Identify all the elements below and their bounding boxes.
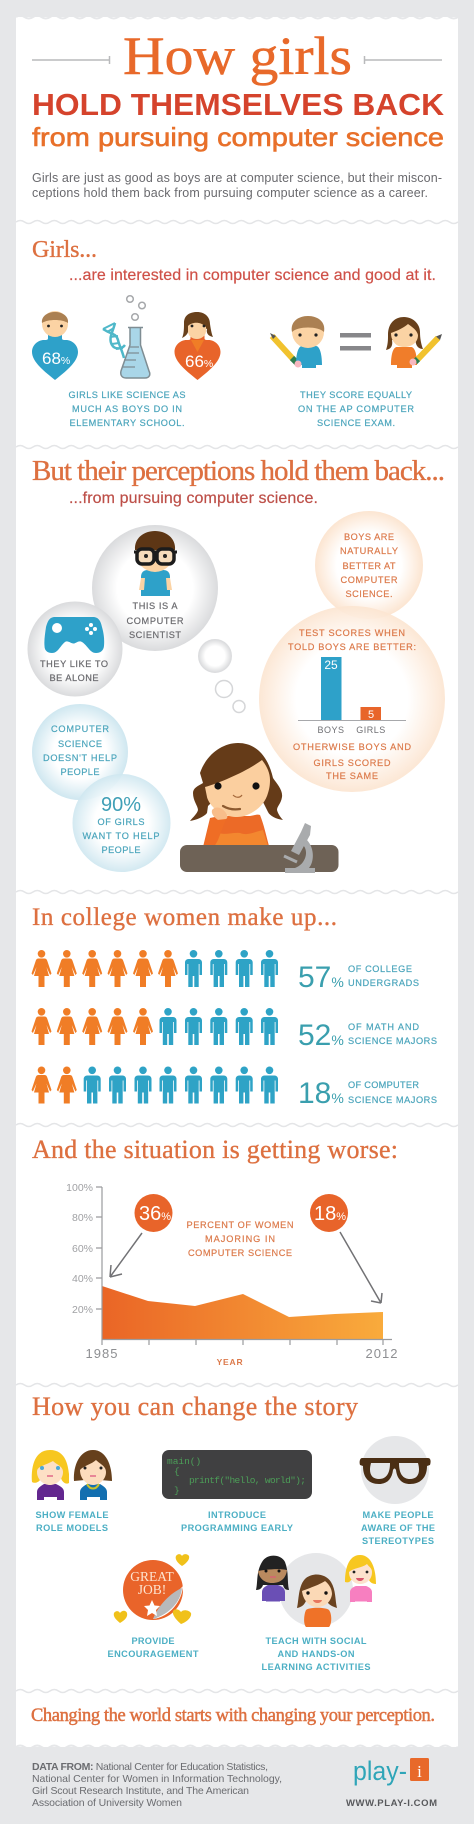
intro text — [32, 171, 442, 200]
area chart: 100% — [66, 1182, 93, 1194]
callout: 36% — [110, 1194, 172, 1277]
icon: great job sticker: GREAT — [130, 1569, 175, 1584]
stat: 18%: SCIENCE MAJORS — [348, 1095, 437, 1105]
bubble: computer scientist: THIS IS A — [132, 601, 178, 611]
section heading: change the story: How you can change the story — [32, 1392, 358, 1421]
bubble: test scores chart: TEST SCORES WHEN — [299, 628, 405, 638]
bubble: boys are naturally better: SCIENCE. — [346, 589, 392, 599]
bubble: test scores chart: GIRLS SCORED — [314, 758, 391, 768]
bubble: boys are naturally better — [315, 511, 423, 619]
caption: stereotypes: MAKE PEOPLE — [362, 1510, 434, 1520]
bubble: computer scientist: SCIENTIST — [129, 630, 181, 640]
bubble: boys are naturally better: NATURALLY — [340, 546, 398, 556]
logo: play-i: i — [417, 1762, 422, 1781]
caption: encouragement: PROVIDE — [132, 1636, 174, 1646]
section heading: perceptions: But their perceptions hold them back... — [32, 455, 445, 487]
caption: stereotypes: STEREOTYPES — [362, 1536, 434, 1546]
stat: 18% — [298, 1077, 437, 1110]
icon: great job sticker — [114, 1554, 191, 1624]
area chart: 2012 — [366, 1346, 398, 1361]
hair — [190, 743, 283, 821]
icon: boy with pencil — [270, 316, 324, 368]
stat: 57%: 57% — [298, 961, 344, 994]
girl: brown hair center — [297, 1575, 337, 1627]
section heading: perceptions: ...from pursuing computer science. — [69, 490, 318, 507]
caption: score equally — [298, 390, 414, 428]
bubble: doesn't help people: COMPUTER — [51, 724, 109, 734]
footer: data sources: Girl Scout Research Institute, and The American — [32, 1785, 249, 1797]
caption: score equally: ON THE AP COMPUTER — [298, 404, 414, 414]
icon: social group of girls — [256, 1553, 376, 1627]
chart caption: PERCENT OF WOMEN — [186, 1220, 294, 1230]
section heading: Girls — [32, 237, 436, 284]
caption: female role models: ROLE MODELS — [36, 1523, 108, 1533]
section heading: perceptions — [32, 455, 445, 507]
code block — [162, 1450, 312, 1499]
pictogram row: 57% — [32, 950, 278, 987]
bubble: 90% want to help: OF GIRLS — [98, 817, 144, 827]
thought bubbles — [198, 640, 245, 712]
callout: 18%: 18% — [314, 1203, 346, 1225]
bubble: like to be alone: THEY LIKE TO — [40, 659, 108, 669]
bubble: doesn't help people: PEOPLE — [60, 767, 100, 777]
stat: 52%: 52% — [298, 1019, 344, 1052]
caption: stereotypes: AWARE OF THE — [361, 1523, 435, 1533]
caption: social and hands-on: AND HANDS-ON — [278, 1649, 355, 1659]
caption: girls like science: ELEMENTARY SCHOOL. — [70, 418, 184, 428]
stat: 57% — [298, 961, 419, 994]
icon: girl with pencil — [386, 317, 442, 368]
caption: introduce programming: PROGRAMMING EARLY — [181, 1523, 293, 1533]
caption: encouragement: ENCOURAGEMENT — [108, 1649, 199, 1659]
section heading: Girls: Girls... — [32, 237, 97, 263]
bubble: like to be alone: BE ALONE — [50, 673, 98, 683]
icon: girl heart 66%: 66% — [185, 352, 213, 371]
logo: play-i — [346, 1756, 437, 1809]
callout: 36%: 36% — [139, 1203, 171, 1225]
illustration: girl at desk with microscope — [180, 743, 338, 873]
footer: data sources — [32, 1761, 282, 1809]
area chart: YEAR — [217, 1357, 243, 1367]
icon: glasses — [360, 1436, 431, 1504]
caption: social and hands-on: TEACH WITH SOCIAL — [266, 1636, 367, 1646]
code block: printf("hello, world"); — [189, 1475, 306, 1486]
caption: girls like science — [68, 390, 186, 428]
bubble: doesn't help people: DOESN'T HELP — [43, 753, 117, 763]
area chart: 40% — [72, 1273, 93, 1285]
area chart — [66, 1182, 398, 1367]
stat: 52% — [298, 1019, 437, 1052]
title line 3: from pursuing computer science — [32, 122, 444, 152]
bubble: doesn't help people — [32, 704, 128, 800]
bar: girls 5: 5 — [368, 709, 374, 721]
caption: social and hands-on — [262, 1636, 370, 1672]
caption: stereotypes — [361, 1510, 435, 1546]
intro text: Girls are just as good as boys are at computer science, but their miscon- — [32, 171, 442, 185]
caption: introduce programming — [181, 1510, 293, 1533]
chart caption — [186, 1220, 294, 1258]
code block: { — [174, 1466, 180, 1477]
desk — [180, 845, 338, 872]
bubble: computer scientist — [92, 525, 218, 651]
bubble: test scores chart: BOYS — [317, 725, 345, 735]
area chart: 1985 — [86, 1346, 118, 1361]
icon: boy heart 68%: 68% — [42, 349, 70, 368]
logo: play-i: WWW.PLAY-I.COM — [346, 1798, 437, 1809]
bubble: test scores chart: TOLD BOYS ARE BETTER: — [288, 642, 416, 652]
section heading: Girls: ...are interested in computer science and good at it. — [69, 267, 436, 284]
icon: microscope — [284, 823, 315, 873]
footer: data sources: Association of University Women — [32, 1797, 182, 1809]
title line 2: HOLD THEMSELVES BACK — [32, 88, 444, 122]
title line 1: How girls — [123, 26, 352, 86]
intro text: ceptions hold them back from pursuing computer science as a career. — [32, 186, 428, 200]
area chart: 20% — [72, 1304, 93, 1316]
caption: female role models: SHOW FEMALE — [36, 1510, 108, 1520]
caption: social and hands-on: LEARNING ACTIVITIES — [262, 1662, 370, 1672]
footer: data sources: DATA FROM: National Center for Education Statistics, — [32, 1761, 268, 1773]
stat: 57%: OF COLLEGE — [348, 964, 412, 974]
pictogram row: 52% — [32, 1008, 278, 1045]
caption: score equally: THEY SCORE EQUALLY — [300, 390, 412, 400]
icon: female role models — [32, 1450, 112, 1500]
bubble: test scores chart: THE SAME — [326, 771, 378, 781]
bubble: computer scientist: COMPUTER — [126, 616, 184, 626]
closing statement: Changing the world starts with changing your perception. — [31, 1706, 435, 1726]
code block: main() — [167, 1456, 201, 1467]
section heading: in college: In college women make up... — [32, 904, 337, 931]
bubble: doesn't help people: SCIENCE — [58, 739, 102, 749]
bubble: 90% want to help: WANT TO HELP — [82, 831, 160, 841]
stat: 18%: OF COMPUTER — [348, 1080, 419, 1090]
bubble: boys are naturally better: BETTER AT — [342, 561, 396, 571]
caption: girls like science: GIRLS LIKE SCIENCE AS — [68, 390, 186, 400]
caption: introduce programming: INTRODUCE — [208, 1510, 266, 1520]
bubble: test scores chart: OTHERWISE BOYS AND — [293, 742, 411, 752]
chart caption: MAJORING IN — [205, 1234, 275, 1244]
caption: encouragement — [108, 1636, 199, 1659]
pictogram row: 18% — [32, 1066, 278, 1104]
footer: data sources: National Center for Women in Information Technology, — [32, 1773, 282, 1785]
code block: } — [174, 1485, 180, 1496]
stat: 52%: SCIENCE MAJORS — [348, 1036, 437, 1046]
bubble: boys are naturally better: COMPUTER — [340, 575, 398, 585]
bar: boys 25 — [321, 657, 342, 720]
face — [205, 760, 270, 817]
bubble: 90% want to help — [72, 774, 170, 872]
shirt — [203, 815, 269, 847]
title block — [32, 26, 444, 152]
icon: girl heart 66% — [174, 312, 220, 380]
girl: blonde — [345, 1555, 376, 1602]
bubble: 90% want to help: PEOPLE — [102, 845, 140, 855]
chart caption: COMPUTER SCIENCE — [188, 1248, 292, 1258]
area chart: 60% — [72, 1243, 93, 1255]
stat: 57%: UNDERGRADS — [348, 978, 419, 988]
hand and sleeve — [212, 808, 227, 820]
icon: equals sign — [340, 333, 371, 350]
stat: 18%: 18% — [298, 1077, 344, 1110]
stat: 52%: OF MATH AND — [348, 1022, 419, 1032]
bubble: 90% want to help: 90% — [101, 794, 141, 816]
bubble: test scores chart — [259, 606, 445, 792]
girl: dark hair — [256, 1556, 289, 1602]
bubble: test scores chart: GIRLS — [356, 725, 386, 735]
caption: female role models — [36, 1510, 108, 1533]
bubble: like to be alone — [28, 602, 122, 696]
bubble: boys are naturally better: BOYS ARE — [344, 532, 394, 542]
icon: boy heart 68% — [32, 311, 78, 380]
icon: great job sticker: JOB! — [138, 1582, 166, 1597]
logo: play-i: play- — [353, 1756, 407, 1786]
section heading: getting worse: And the situation is getting worse: — [32, 1135, 398, 1164]
bar: boys 25: 25 — [324, 658, 338, 672]
callout: 18% — [310, 1194, 382, 1303]
icon: flask and DNA — [103, 296, 150, 378]
area chart: 80% — [72, 1212, 93, 1224]
caption: score equally: SCIENCE EXAM. — [317, 418, 395, 428]
caption: girls like science: MUCH AS BOYS DO IN — [72, 404, 182, 414]
bar: girls 5 — [360, 707, 381, 721]
